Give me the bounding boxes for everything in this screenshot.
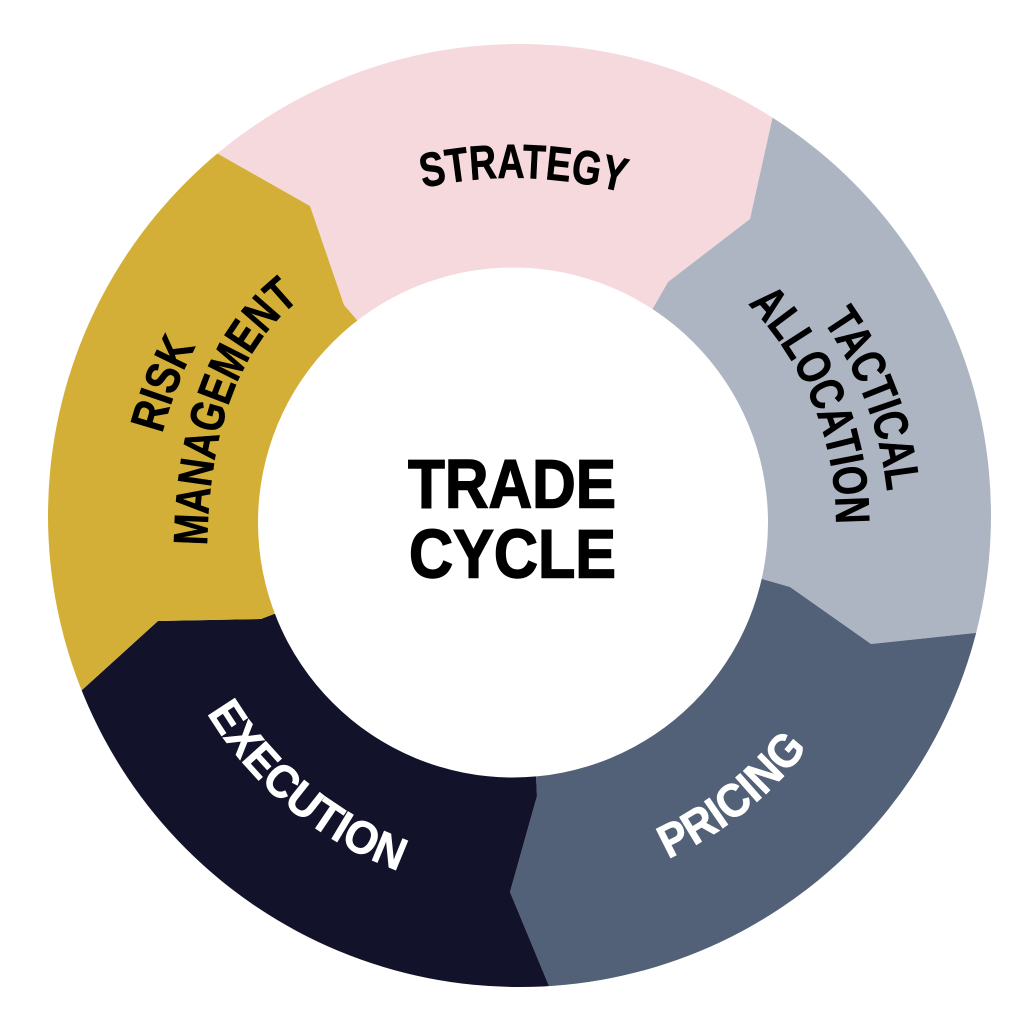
title: trade cycle: TRADE bbox=[408, 446, 616, 522]
label: tactical: TACTICAL bbox=[828, 302, 918, 490]
segment: strategy bbox=[218, 44, 772, 320]
label: allocation: ALLOCATION bbox=[748, 289, 870, 522]
segment: risk management bbox=[48, 154, 358, 690]
label: execution: EXECUTION bbox=[208, 698, 408, 870]
title: trade cycle: CYCLE bbox=[409, 516, 616, 592]
label: risk: RISK bbox=[130, 332, 196, 432]
label: management: MANAGEMENT bbox=[174, 274, 294, 544]
segment: tactical allocation bbox=[652, 118, 991, 644]
segment: execution bbox=[82, 614, 549, 987]
center circle bbox=[258, 268, 768, 778]
label: pricing: PRICING bbox=[656, 734, 803, 858]
segment: pricing bbox=[510, 579, 976, 986]
label: strategy: STRATEGY bbox=[420, 144, 630, 190]
title: trade cycle bbox=[408, 446, 616, 592]
